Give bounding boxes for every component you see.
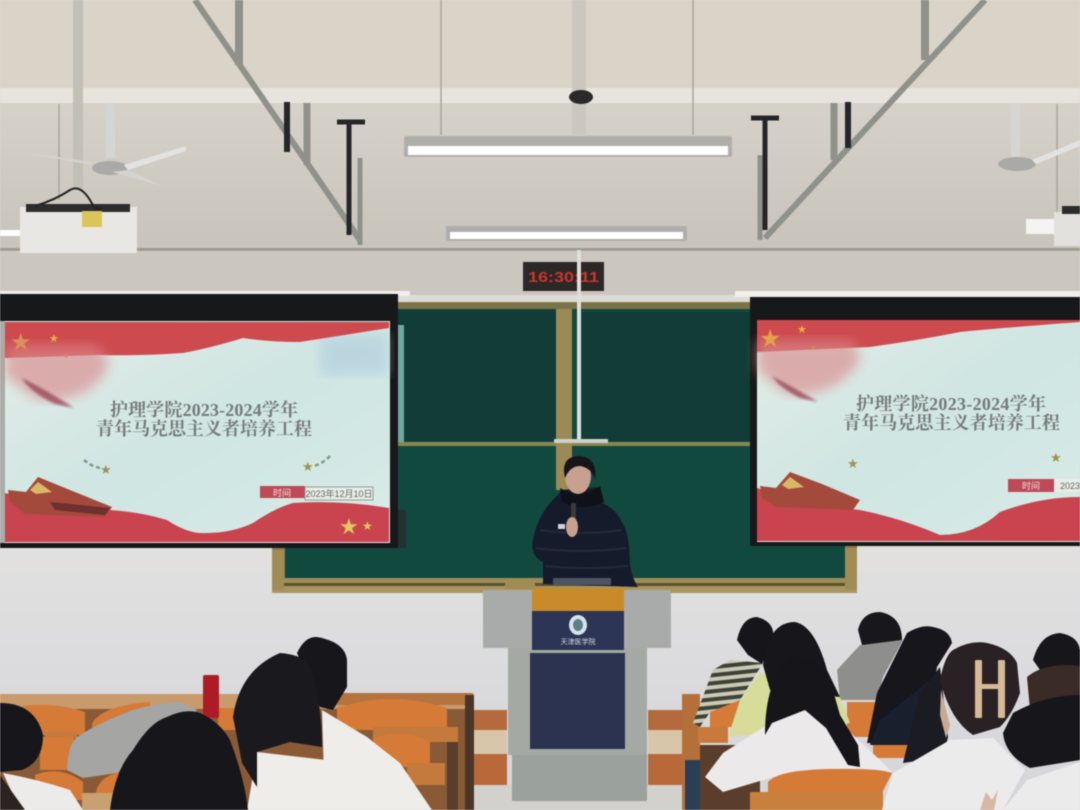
slide gold ornaments: ★: [847, 457, 859, 472]
white coat student with hair clip: [882, 738, 1025, 810]
speaker: [505, 456, 638, 589]
slide date label: 2023: [1060, 481, 1080, 491]
side shelves by lectern: [473, 710, 684, 810]
digital clock: 16:30:11: [528, 269, 599, 286]
slide gold ornaments: ★: [302, 460, 314, 475]
ceiling lights: [0, 136, 1056, 241]
right projection screen: ★: [810, 344, 816, 352]
left desks and chairs: [0, 675, 474, 810]
dark hair student: [867, 626, 952, 745]
right students: [693, 612, 1080, 810]
front chair and desk: [768, 769, 892, 797]
slide gold ornaments: ★: [1050, 451, 1062, 466]
security camera: [569, 90, 593, 104]
blackboard: [272, 250, 857, 593]
slide gold ornaments: [847, 451, 1062, 472]
right projection screen: [750, 297, 1080, 546]
left projection screen: ★: [63, 352, 69, 360]
slide date label: 时间: [1022, 480, 1040, 491]
slide corner stars: [339, 515, 373, 540]
left students: [0, 637, 432, 810]
slide gold ornaments: [84, 456, 330, 478]
lectern: 天津医学院: [560, 637, 596, 646]
slide flag banner: [5, 322, 389, 358]
slide stars: ★: [10, 328, 32, 356]
ceiling pipes and brackets: [0, 0, 1080, 250]
grey puffer student: [837, 640, 903, 700]
left projection screen: [0, 294, 398, 548]
hair clip: [975, 660, 1005, 718]
slide stars: ★: [759, 324, 781, 353]
slide gate icon: [760, 472, 860, 510]
long hair student: [903, 667, 948, 763]
slide gold ornaments: ★: [100, 463, 112, 478]
left projection screen: ★: [49, 332, 59, 345]
slide date label: [1008, 479, 1080, 492]
digital clock: [523, 262, 604, 291]
slide corner stars: ★: [362, 519, 373, 533]
striped student: [693, 660, 763, 727]
right projection screen: ★: [797, 323, 807, 336]
slide title: 护理学院2023-2024学年: [110, 399, 298, 420]
right desks and chairs: [682, 694, 907, 810]
red bottle: [203, 675, 219, 718]
slide date label: [260, 486, 373, 500]
ceiling fans: [20, 103, 1080, 186]
yellow jacket student: [728, 673, 850, 737]
slide flag banner: [757, 320, 1080, 352]
slide corner stars: ★: [339, 515, 359, 540]
slide title: 护理学院2023-2024学年: [856, 393, 1046, 414]
slide gate icon: [8, 477, 112, 517]
lectern: [483, 588, 671, 801]
grey coat on desk: [67, 702, 197, 778]
right projection screen: 青年马克思主义者培养工程: [843, 412, 1060, 433]
projectors: [20, 188, 1080, 253]
white coat student: [705, 707, 892, 792]
front right student: [1033, 633, 1080, 670]
slide date label: 2023年12月10日: [305, 488, 373, 499]
left projection screen: 青年马克思主义者培养工程: [96, 418, 312, 439]
slide date label: 时间: [273, 487, 291, 498]
slide bottom wave: [5, 493, 389, 542]
slide bottom wave: [757, 488, 1080, 541]
